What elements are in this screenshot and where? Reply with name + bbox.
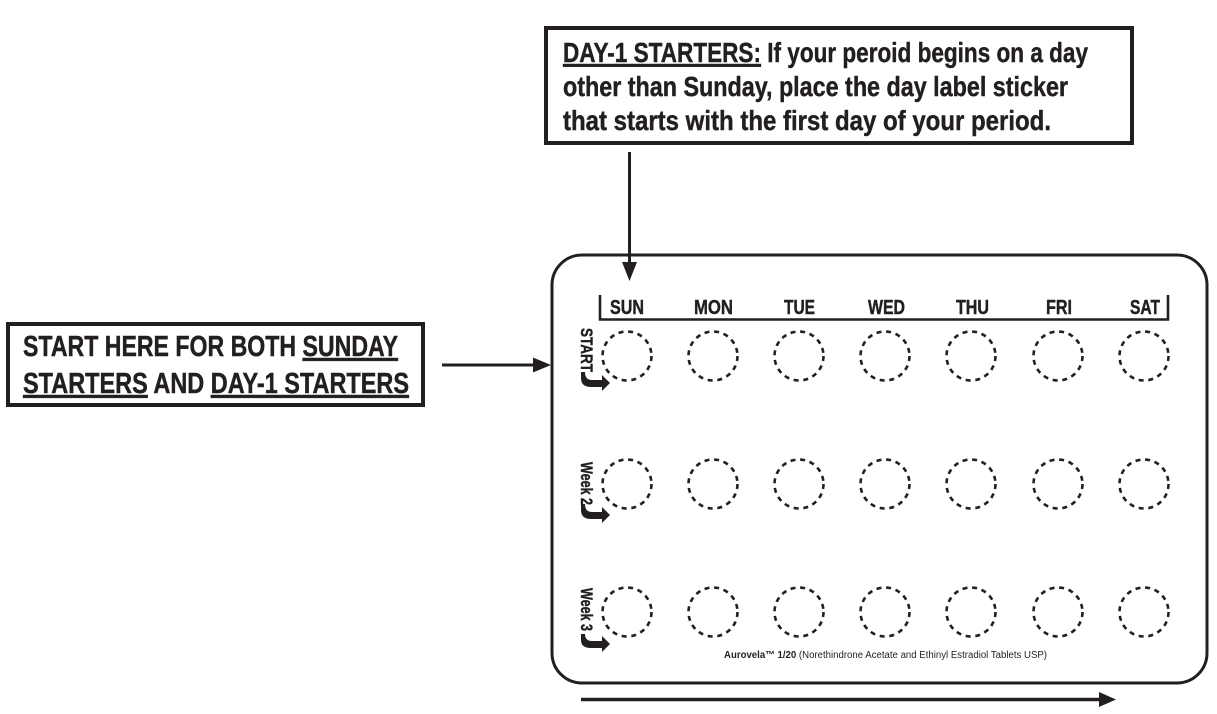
- arrow: callout to Sunday column: [622, 152, 637, 281]
- product name: Aurovela™ 1/20 (Norethindrone Acetate and Ethinyl Estradiol Tablets USP): [724, 650, 1047, 661]
- callout: day-1 starters: DAY-1 STARTERS: If your peroid begins on a day: [563, 37, 1088, 68]
- day header row: FRI: [1046, 297, 1072, 319]
- callout: day-1 starters: [546, 28, 1132, 143]
- callout: day-1 starters: that starts with the first day of your period.: [563, 105, 1051, 136]
- callout: day-1 starters: other than Sunday, place the day label sticker: [563, 71, 1068, 102]
- arrow: start here to card: [442, 358, 551, 372]
- callout: start here: START HERE FOR BOTH SUNDAY: [23, 331, 398, 363]
- icon: start arrow: [581, 372, 610, 391]
- callout: start here: [8, 324, 423, 405]
- day header row: TUE: [784, 297, 815, 319]
- icon: week 2 arrow: [581, 504, 610, 523]
- day header row: SUN: [610, 297, 644, 319]
- row 2 pill circles: [602, 460, 1168, 508]
- row 3 pill circles: [602, 588, 1168, 636]
- day header row: SAT: [1130, 297, 1160, 319]
- panel: pill pack card: [552, 255, 1207, 683]
- callout: start here: STARTERS AND DAY-1 STARTERS: [23, 368, 409, 400]
- label: week 3: Week 3: [577, 588, 596, 631]
- icon: week 3 arrow: [581, 634, 610, 652]
- row 1 pill circles: [602, 332, 1168, 380]
- day header row: MON: [694, 297, 733, 319]
- arrow: bottom direction: [581, 692, 1116, 707]
- label: start: START: [577, 328, 596, 372]
- day header row: WED: [868, 297, 905, 319]
- day header row: THU: [956, 297, 989, 319]
- label: week 2: Week 2: [577, 462, 596, 505]
- day header row: [600, 295, 1168, 320]
